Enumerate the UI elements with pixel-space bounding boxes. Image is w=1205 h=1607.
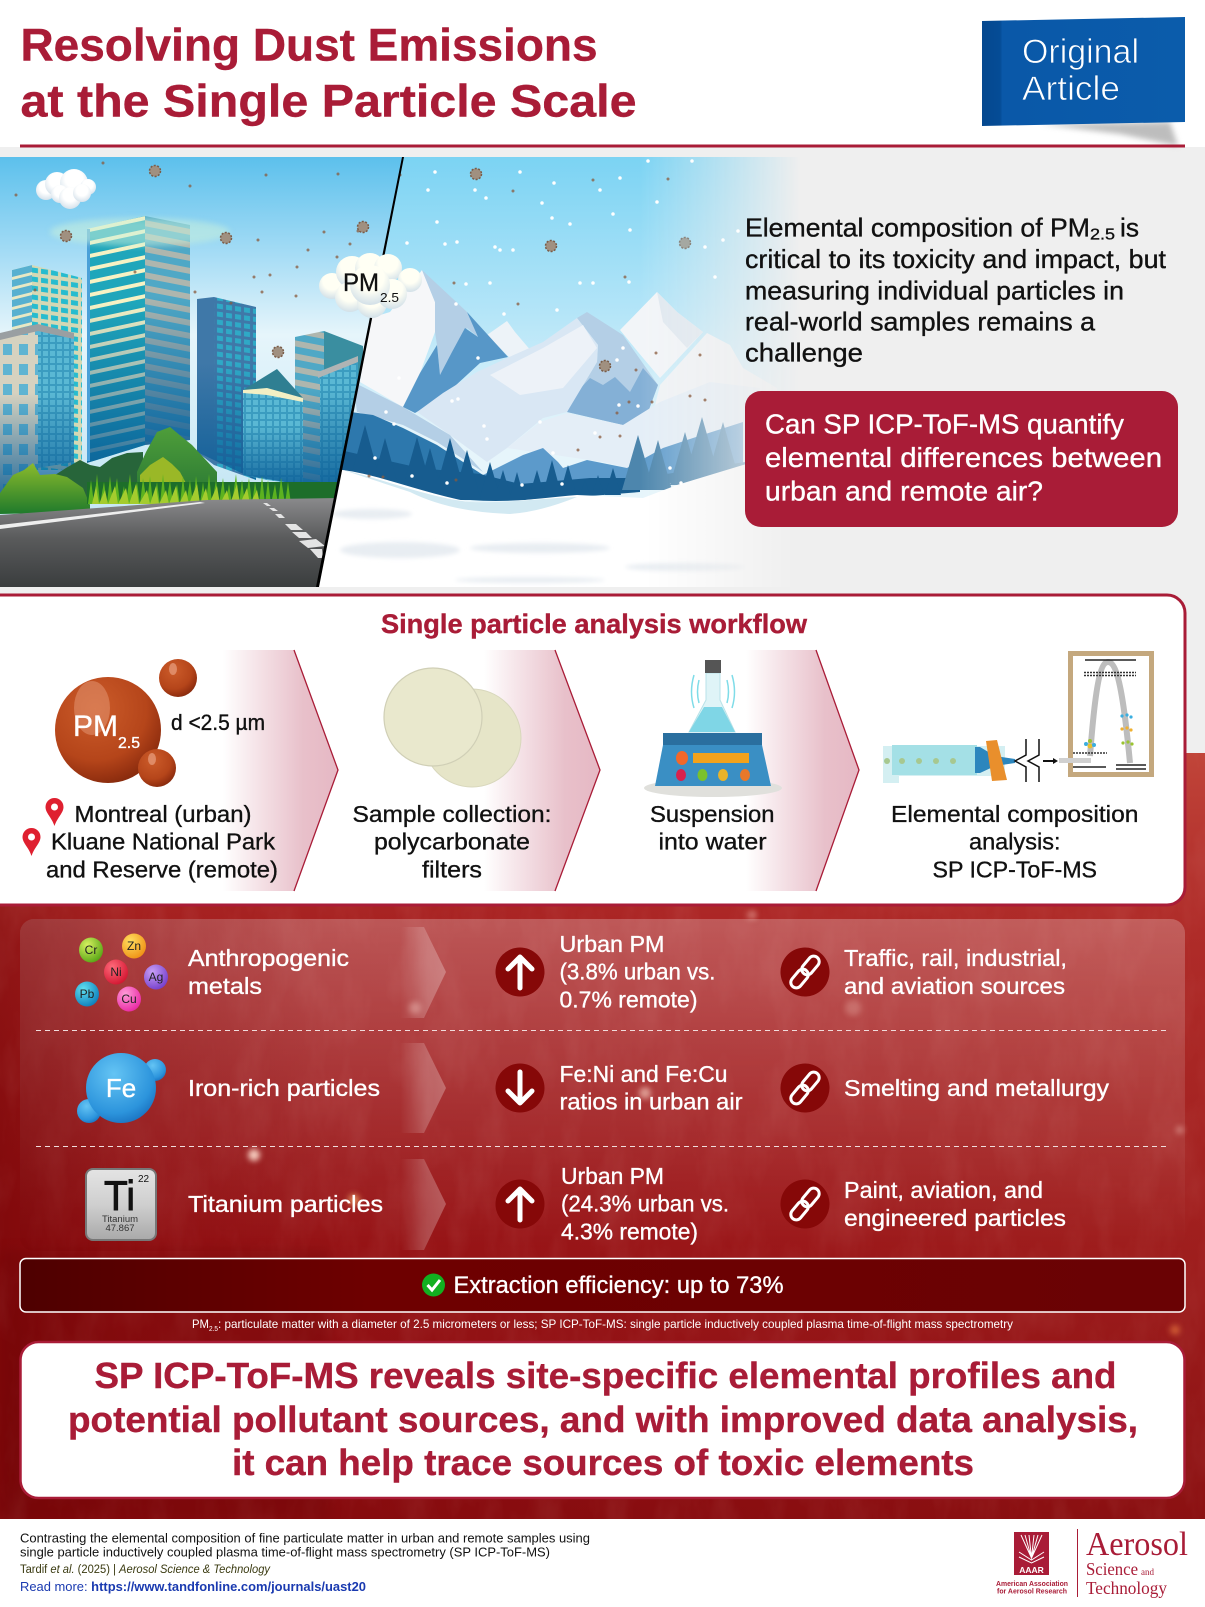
footer: citation: Read more: https://www.tandfonline.com/journals/uast20 <box>20 1580 366 1594</box>
panel: workflow <box>0 595 1185 905</box>
road <box>0 498 340 587</box>
sources: iron: Smelting and metallurgy <box>844 1075 1109 1101</box>
icon: down arrow <box>496 1064 544 1112</box>
sources: titanium: engineered particles <box>844 1205 1066 1231</box>
stat: iron ratios: ratios in urban air <box>560 1088 743 1114</box>
icon: PM2.5 particles: 2.5 <box>118 735 140 752</box>
badge: Original Article: Original <box>1022 33 1139 71</box>
icon: link <box>770 1169 840 1239</box>
label: iron-rich particles: Iron-rich particles <box>188 1075 380 1101</box>
cloud: PM2.5 label: 2.5 <box>380 290 399 305</box>
callout: research question <box>745 391 1178 527</box>
text: sample collection: Sample collection: <box>352 801 552 827</box>
stat: urban PM metals: Urban PM <box>560 931 664 957</box>
title: at the Single Particle Scale <box>20 76 636 126</box>
footnote: abbreviations: 2.5 <box>209 1326 218 1333</box>
icon: flask on stirrer <box>644 660 782 797</box>
icon: metal element balls: Zn <box>127 939 141 953</box>
icon: metal element balls <box>75 934 168 1012</box>
sources: metals: and aviation sources <box>844 973 1065 999</box>
panel: conclusion: potential pollutant sources, and with improved data analysis, <box>68 1399 1138 1440</box>
illustration: urban versus remote landscape <box>0 157 830 587</box>
blue hills and tree line <box>340 382 745 501</box>
divider line <box>316 157 404 587</box>
efficiency text: Extraction efficiency: up to 73% <box>454 1272 784 1299</box>
footer: citation: Contrasting the elemental composition of fine particulate matter in urban and remote samples using <box>20 1532 590 1546</box>
stat: iron ratios <box>560 1061 743 1114</box>
stat: urban PM titanium: Urban PM <box>561 1163 664 1189</box>
icon: titanium tile: Ti <box>104 1172 135 1219</box>
arrow: step 1 <box>223 650 338 891</box>
label: anthropogenic metals <box>188 945 349 999</box>
logo: AAAR: American Association <box>996 1579 1068 1588</box>
title: Resolving Dust Emissions <box>20 20 598 70</box>
panel: results table <box>20 919 1185 1251</box>
callout: research question: Can SP ICP-ToF-MS quantify <box>765 408 1124 440</box>
text: sample collection: filters <box>422 856 482 882</box>
text: elemental analysis: analysis: <box>969 828 1060 854</box>
mountain scene <box>319 157 788 587</box>
workflow heading: Single particle analysis workflow <box>381 609 808 639</box>
icon: green check <box>422 1274 445 1296</box>
text: sampling sites: Montreal (urban) <box>74 801 251 827</box>
cloud: PM2.5 label <box>319 253 422 318</box>
foreground snow <box>319 464 747 587</box>
snow foothills <box>565 390 691 455</box>
icon: up arrow <box>496 1180 544 1228</box>
text: sampling sites: Kluane National Park <box>51 828 275 854</box>
logo: AAAR: for Aerosol Research <box>997 1586 1067 1596</box>
text: sampling sites <box>46 801 278 882</box>
stat: urban PM metals: 0.7% remote) <box>560 986 698 1012</box>
panel: conclusion <box>20 1342 1184 1498</box>
badge: Original Article: Article <box>1022 70 1120 108</box>
sources: metals: Traffic, rail, industrial, <box>844 945 1067 971</box>
footnote: abbreviations: : particulate matter with a diameter of 2.5 micrometers or less; SP ICP-ToF-MS: single particle inductively coupled plasma time-of-flight mass spectrometry <box>218 1317 1013 1331</box>
icon: metal element balls: Cu <box>121 992 137 1006</box>
intro text block: 2.5 <box>1090 226 1115 244</box>
arrow: row 1 <box>400 927 446 1018</box>
stat: urban PM titanium: (24.3% urban vs. <box>561 1190 729 1216</box>
logo: Aerosol Science and Technology: Aerosol <box>1086 1526 1188 1563</box>
intro text block: real-world samples remains a <box>745 306 1096 336</box>
intro text block: is <box>1120 212 1139 242</box>
extraction efficiency bar <box>20 1258 1185 1312</box>
panel: conclusion: it can help trace sources of toxic elements <box>232 1442 974 1483</box>
row 3: titanium particles <box>86 1159 1066 1250</box>
icon: up arrow <box>496 948 544 996</box>
text: elemental analysis <box>891 801 1138 882</box>
arrow: step 3 <box>746 650 859 891</box>
big left mountain <box>360 270 508 413</box>
intro text block: critical to its toxicity and impact, but <box>745 244 1167 274</box>
text: suspension <box>650 801 774 854</box>
text: suspension: Suspension <box>650 801 774 827</box>
snowflake dots <box>375 161 738 485</box>
city scene <box>0 157 410 587</box>
header background <box>0 0 1205 147</box>
icon: metal element balls: Pb <box>80 987 95 1001</box>
callout: research question: urban and remote air? <box>765 476 1043 506</box>
icon: polycarbonate filters <box>384 668 521 787</box>
sources: metals <box>844 945 1067 999</box>
icon: PM2.5 particles: PM <box>73 710 118 743</box>
logo: Aerosol Science and Technology: Science <box>1086 1559 1138 1579</box>
header rule <box>20 144 1185 148</box>
small dust dots <box>16 163 705 480</box>
footer: citation: single particle inductively coupled plasma time-of-flight mass spectrometry (SP ICP-ToF-MS) <box>20 1546 550 1560</box>
icon: titanium tile <box>86 1169 156 1240</box>
intro text block <box>745 212 1167 368</box>
icon: PM2.5 particles <box>55 659 197 787</box>
particle size label: d <2.5 µm <box>171 710 265 735</box>
icon: titanium tile: 22 <box>138 1174 150 1185</box>
footer: citation: Tardif et al. (2025) | Aerosol Science & Technology <box>20 1564 271 1576</box>
PM2.5 particles <box>60 166 690 372</box>
label: titanium particles: Titanium particles <box>188 1191 383 1217</box>
icon: mass spectrometer <box>883 654 1152 783</box>
logo: Aerosol Science and Technology: and <box>1141 1567 1154 1577</box>
stat: iron ratios: Fe:Ni and Fe:Cu <box>560 1061 728 1087</box>
icon: titanium tile: 47.867 <box>105 1223 135 1234</box>
cloud: PM2.5 label: PM <box>343 269 379 297</box>
building: tall striped tower <box>87 216 190 463</box>
title <box>20 20 636 126</box>
callout: research question: elemental differences between <box>765 442 1162 473</box>
cloud: top left <box>36 169 96 209</box>
stat: urban PM titanium <box>561 1163 729 1244</box>
icon: link <box>770 937 840 1007</box>
footer background <box>0 1519 1205 1607</box>
icon: metal element balls: Cr <box>85 943 97 957</box>
stat: urban PM metals <box>560 931 716 1012</box>
intro text block: Elemental composition of PM <box>745 212 1090 242</box>
building: teal roof <box>243 369 303 485</box>
arrow: row 2 <box>400 1043 446 1133</box>
icon: link <box>770 1053 840 1123</box>
text: suspension: into water <box>658 828 767 854</box>
text: sampling sites: and Reserve (remote) <box>46 856 278 882</box>
panel: conclusion: SP ICP-ToF-MS reveals site-specific elemental profiles and <box>94 1355 1116 1396</box>
stat: urban PM titanium: 4.3% remote) <box>561 1218 698 1244</box>
arrow: step 2 <box>484 650 600 891</box>
text: sample collection <box>352 801 552 882</box>
logo: AAAR: AAAR <box>1019 1565 1044 1575</box>
icon: Fe particle: Fe <box>106 1073 136 1103</box>
intro text block: challenge <box>745 338 863 368</box>
center mountain <box>417 312 658 462</box>
text: sample collection: polycarbonate <box>374 828 530 854</box>
text: elemental analysis: Elemental composition <box>891 801 1138 827</box>
building: front left <box>0 324 74 495</box>
row 2: iron-rich particles <box>77 1043 1109 1133</box>
icon: location pin Kluane <box>22 828 40 856</box>
vegetation <box>0 427 337 514</box>
row 1: anthropogenic metals <box>75 927 1067 1018</box>
icon: metal element balls: Ni <box>110 965 122 979</box>
footnote: abbreviations: PM <box>192 1317 209 1331</box>
text: elemental analysis: SP ICP-ToF-MS <box>932 856 1097 882</box>
logo: Aerosol Science and Technology: Technology <box>1086 1578 1167 1598</box>
red textured background <box>0 753 1205 1519</box>
logo: Aerosol Science and Technology <box>1077 1526 1188 1598</box>
icon: location pin Montreal <box>46 798 64 826</box>
label: anthropogenic metals: Anthropogenic <box>188 945 349 971</box>
building: right block <box>295 331 363 485</box>
arrow: row 3 <box>400 1159 446 1250</box>
badge: Original Article <box>982 17 1185 146</box>
stat: urban PM metals: (3.8% urban vs. <box>560 958 716 984</box>
building: back left <box>12 265 82 470</box>
logo: AAAR <box>996 1532 1068 1596</box>
icon: Fe particle <box>77 1053 166 1123</box>
sources: titanium <box>844 1177 1066 1231</box>
footer: citation <box>20 1532 590 1594</box>
light grey section background <box>0 147 1205 767</box>
label: anthropogenic metals: metals <box>188 973 262 999</box>
icon: metal element balls: Ag <box>149 970 163 984</box>
intro text block: measuring individual particles in <box>745 276 1124 306</box>
icon: titanium tile: Titanium <box>102 1214 138 1225</box>
sources: titanium: Paint, aviation, and <box>844 1177 1043 1203</box>
building: blue tower <box>197 297 256 480</box>
far right peaks <box>488 292 760 405</box>
